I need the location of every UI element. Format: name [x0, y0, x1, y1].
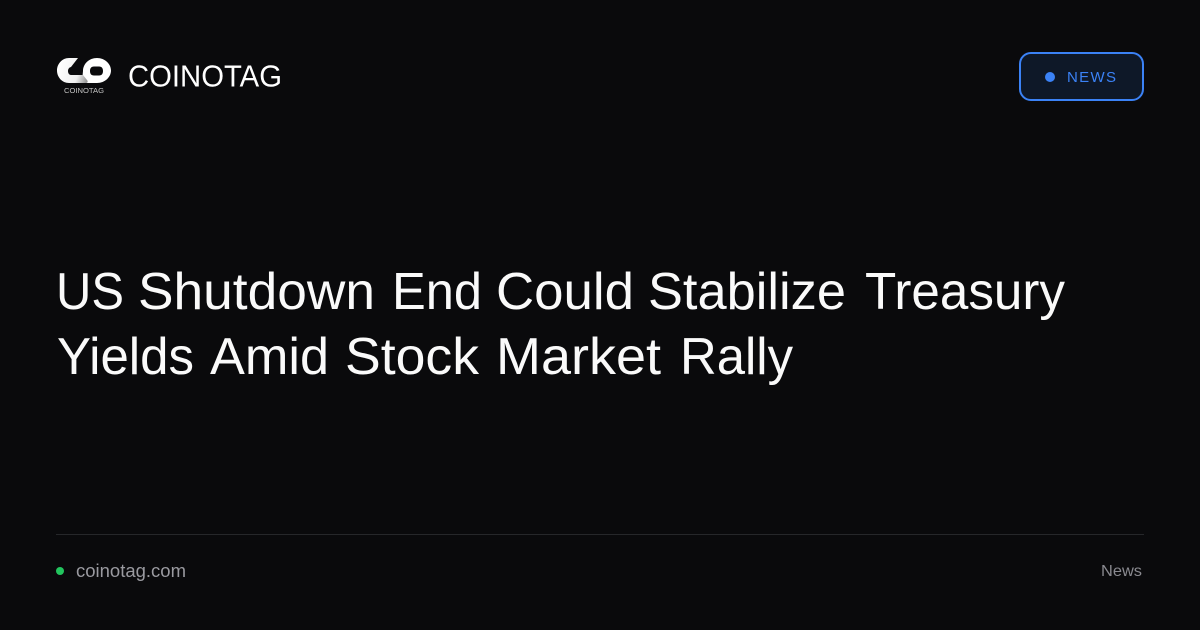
title: End — [392, 263, 482, 321]
badge: NEWS — [1020, 53, 1143, 100]
badge label: NEWS — [1067, 69, 1116, 86]
icon: interlinked CO mark — [57, 58, 111, 95]
site url: coinotag.com — [76, 561, 186, 581]
logo: Coinotag brand — [57, 58, 282, 95]
title: Yields — [57, 328, 194, 386]
badge dot — [1045, 72, 1055, 82]
wordmark: COINOTAG — [128, 58, 282, 94]
footer: site — [56, 561, 186, 581]
badge frame — [1020, 53, 1143, 100]
title: Shutdown — [138, 263, 375, 321]
title: Amid — [210, 328, 329, 386]
small logo caption: COINOTAG — [64, 88, 104, 95]
title: US — [56, 263, 124, 321]
title: Could — [496, 263, 634, 321]
status dot — [56, 567, 64, 575]
title: Market — [496, 328, 662, 386]
title: Treasury — [865, 263, 1065, 321]
title: Stock — [345, 328, 480, 386]
divider — [56, 534, 1144, 535]
footer: category: News — [1101, 563, 1142, 580]
title: Stabilize — [648, 263, 846, 321]
title: Rally — [680, 328, 793, 386]
title — [56, 263, 1065, 386]
